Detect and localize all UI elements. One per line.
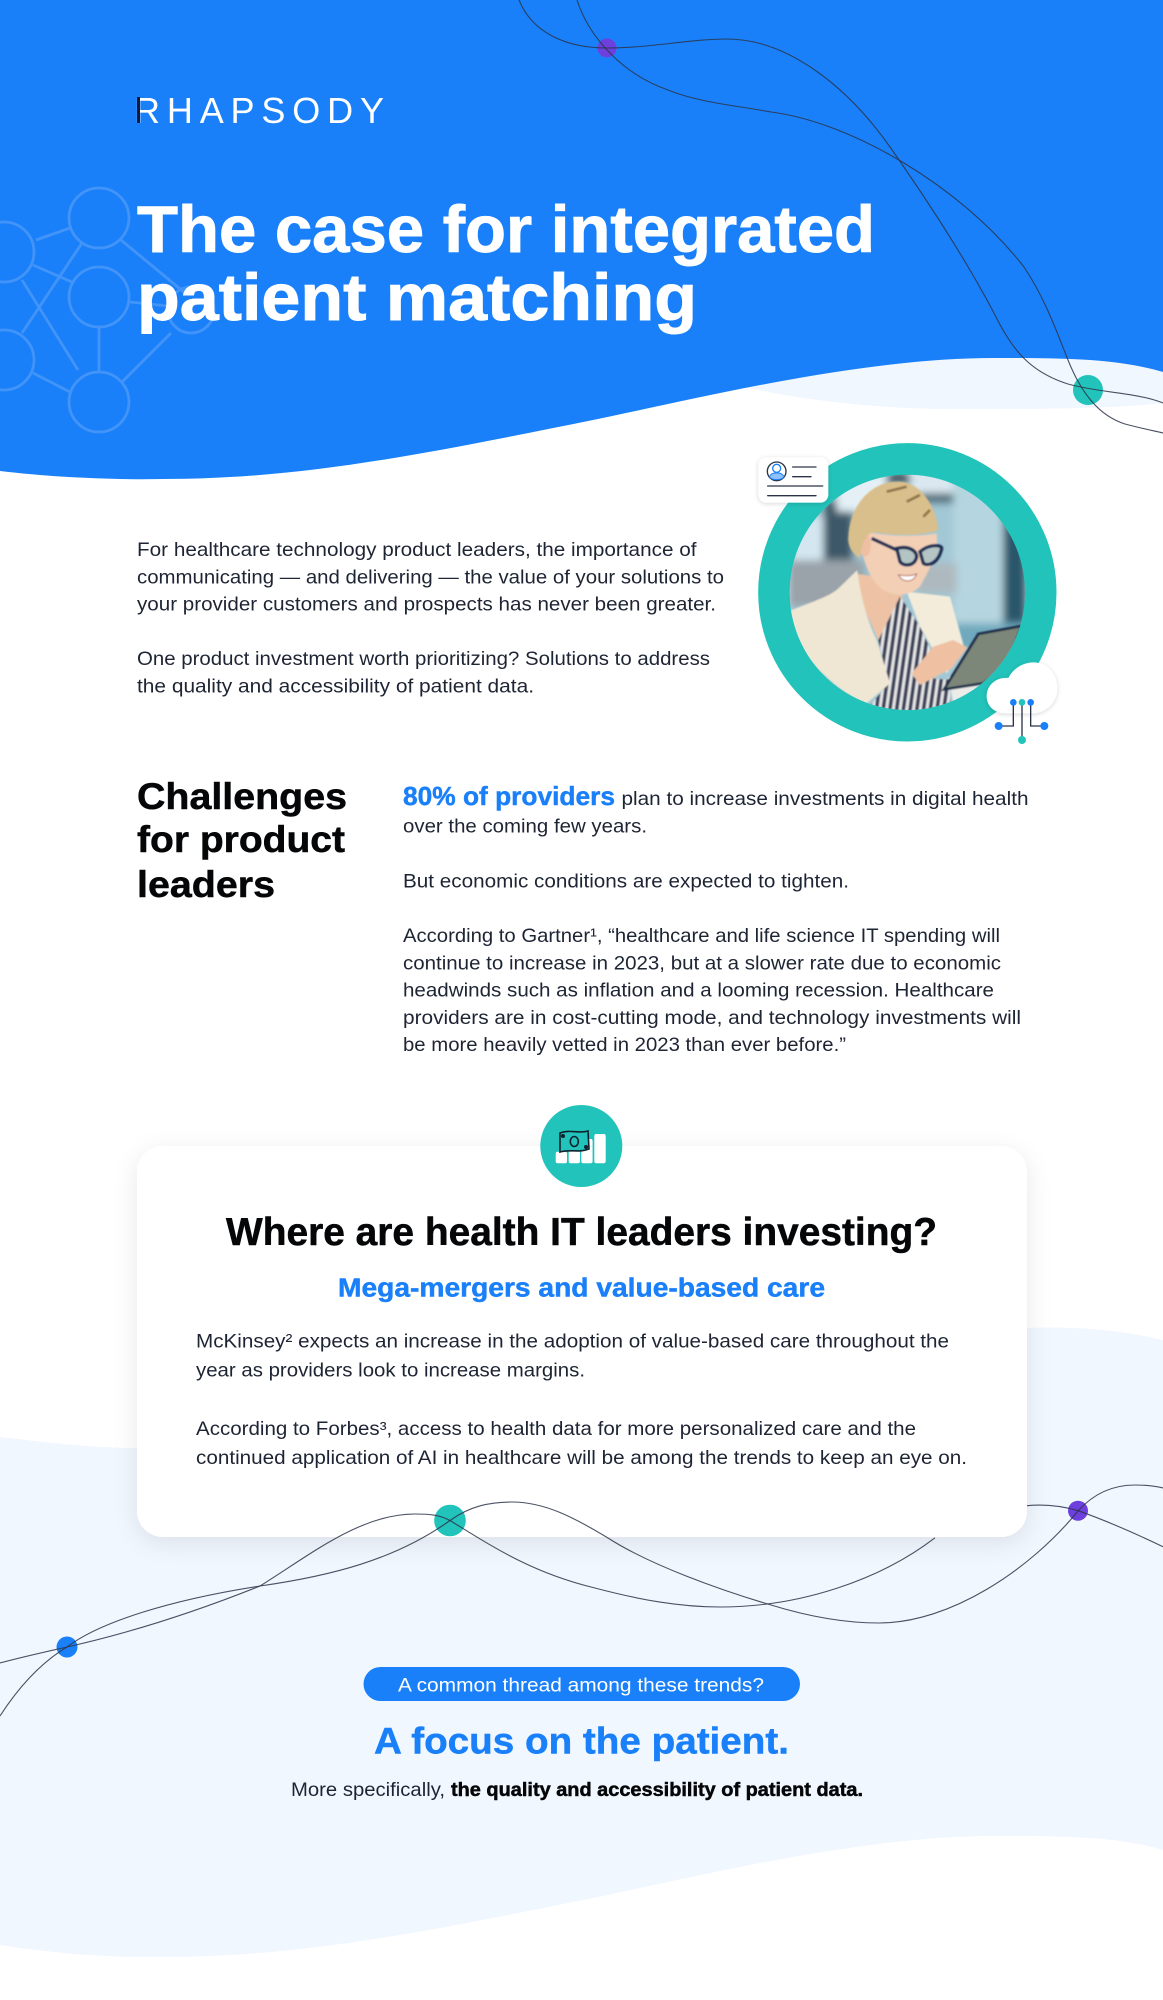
jacket (788, 570, 890, 703)
neck and chest (857, 574, 904, 640)
node: purple (598, 38, 616, 58)
tablet (944, 626, 1022, 689)
challenges body text: According to Gartner¹, “healthcare and life science IT spending will (403, 925, 1000, 947)
card body text (196, 1331, 967, 1469)
challenges body text: headwinds such as inflation and a looming recession. Healthcare (403, 980, 994, 1002)
decorative network icon (0, 188, 214, 432)
teal ring (774, 459, 1041, 726)
hair (848, 482, 938, 558)
title: The case for integrated (137, 192, 875, 266)
line 2 (0, 1514, 935, 1663)
intro text: For healthcare technology product leaders, the importance of (137, 539, 697, 561)
challenges body text: providers are in cost-cutting mode, and technology investments will (403, 1007, 1021, 1029)
bottom connector nodes and lines (0, 1485, 1163, 1716)
node: purple (1068, 1501, 1088, 1521)
challenges body text: plan to increase investments in digital health (622, 788, 1028, 810)
heading: a focus on the patient: A focus on the patient. (374, 1721, 789, 1762)
bottom white wave (0, 1836, 1163, 2000)
intro text: communicating — and delivering — the value of your solutions to (137, 566, 724, 588)
line A (519, 0, 1163, 403)
photo with teal ring (758, 457, 1057, 744)
icon: patient record card (758, 457, 828, 503)
glasses (872, 538, 897, 550)
card body text: continued application of AI in healthcare will be among the trends to keep an eye on. (196, 1447, 967, 1469)
line 1 (0, 1485, 1163, 1716)
card heading: Where are health IT leaders investing? (226, 1211, 937, 1254)
blouse (865, 597, 951, 712)
node: teal (1073, 375, 1103, 405)
top connector nodes and lines (519, 0, 1163, 433)
pill: common thread (364, 1667, 800, 1701)
intro text (137, 539, 724, 698)
challenges body text: But economic conditions are expected to tighten. (403, 870, 849, 892)
line B (577, 0, 1163, 433)
heading: challenges for product leaders (137, 776, 347, 905)
face (863, 532, 937, 595)
title (137, 192, 875, 334)
icon: money and bar chart badge (540, 1105, 622, 1187)
intro text: your provider customers and prospects has never been greater. (137, 594, 716, 616)
photo: woman using tablet (787, 473, 1030, 713)
challenges body text: continue to increase in 2023, but at a slower rate due to economic (403, 952, 1001, 974)
node: blue (56, 1636, 78, 1658)
challenges body text: be more heavily vetted in 2023 than ever before.” (403, 1034, 846, 1056)
title: patient matching (137, 260, 697, 334)
heading: challenges for product leaders: leaders (137, 864, 275, 905)
sleeve hand (912, 640, 967, 685)
closing statement: the quality and accessibility of patient data. (451, 1779, 863, 1801)
card body text: year as providers look to increase margins. (196, 1360, 585, 1382)
smile (898, 574, 917, 581)
pill: common thread: A common thread among these trends? (398, 1676, 764, 1697)
lower page background wave (0, 1328, 1163, 2000)
card body text: According to Forbes³, access to health data for more personalized care and the (196, 1418, 916, 1440)
card body text: McKinsey² expects an increase in the adoption of value-based care throughout the (196, 1331, 949, 1353)
header blue wave panel (0, 0, 1163, 479)
intro text: the quality and accessibility of patient data. (137, 676, 534, 698)
node: teal (434, 1505, 466, 1536)
logo: RHAPSODY: RHAPSODY (134, 90, 384, 131)
stat: 80% of providers: 80% of providers (403, 781, 615, 811)
panel: investing card (137, 1146, 1027, 1537)
heading: challenges for product leaders: for product (137, 819, 345, 860)
closing statement: More specifically, (291, 1779, 445, 1801)
challenges body text: over the coming few years. (403, 816, 647, 838)
header light blob (700, 300, 1163, 409)
card subheading: Mega-mergers and value-based care (338, 1275, 825, 1303)
heading: challenges for product leaders: Challenges (137, 776, 347, 817)
line 2 continued (1027, 1505, 1163, 1547)
challenges body text (403, 781, 1028, 1056)
icon: cloud circuit (987, 662, 1057, 744)
intro text: One product investment worth prioritizing? Solutions to address (137, 648, 710, 670)
